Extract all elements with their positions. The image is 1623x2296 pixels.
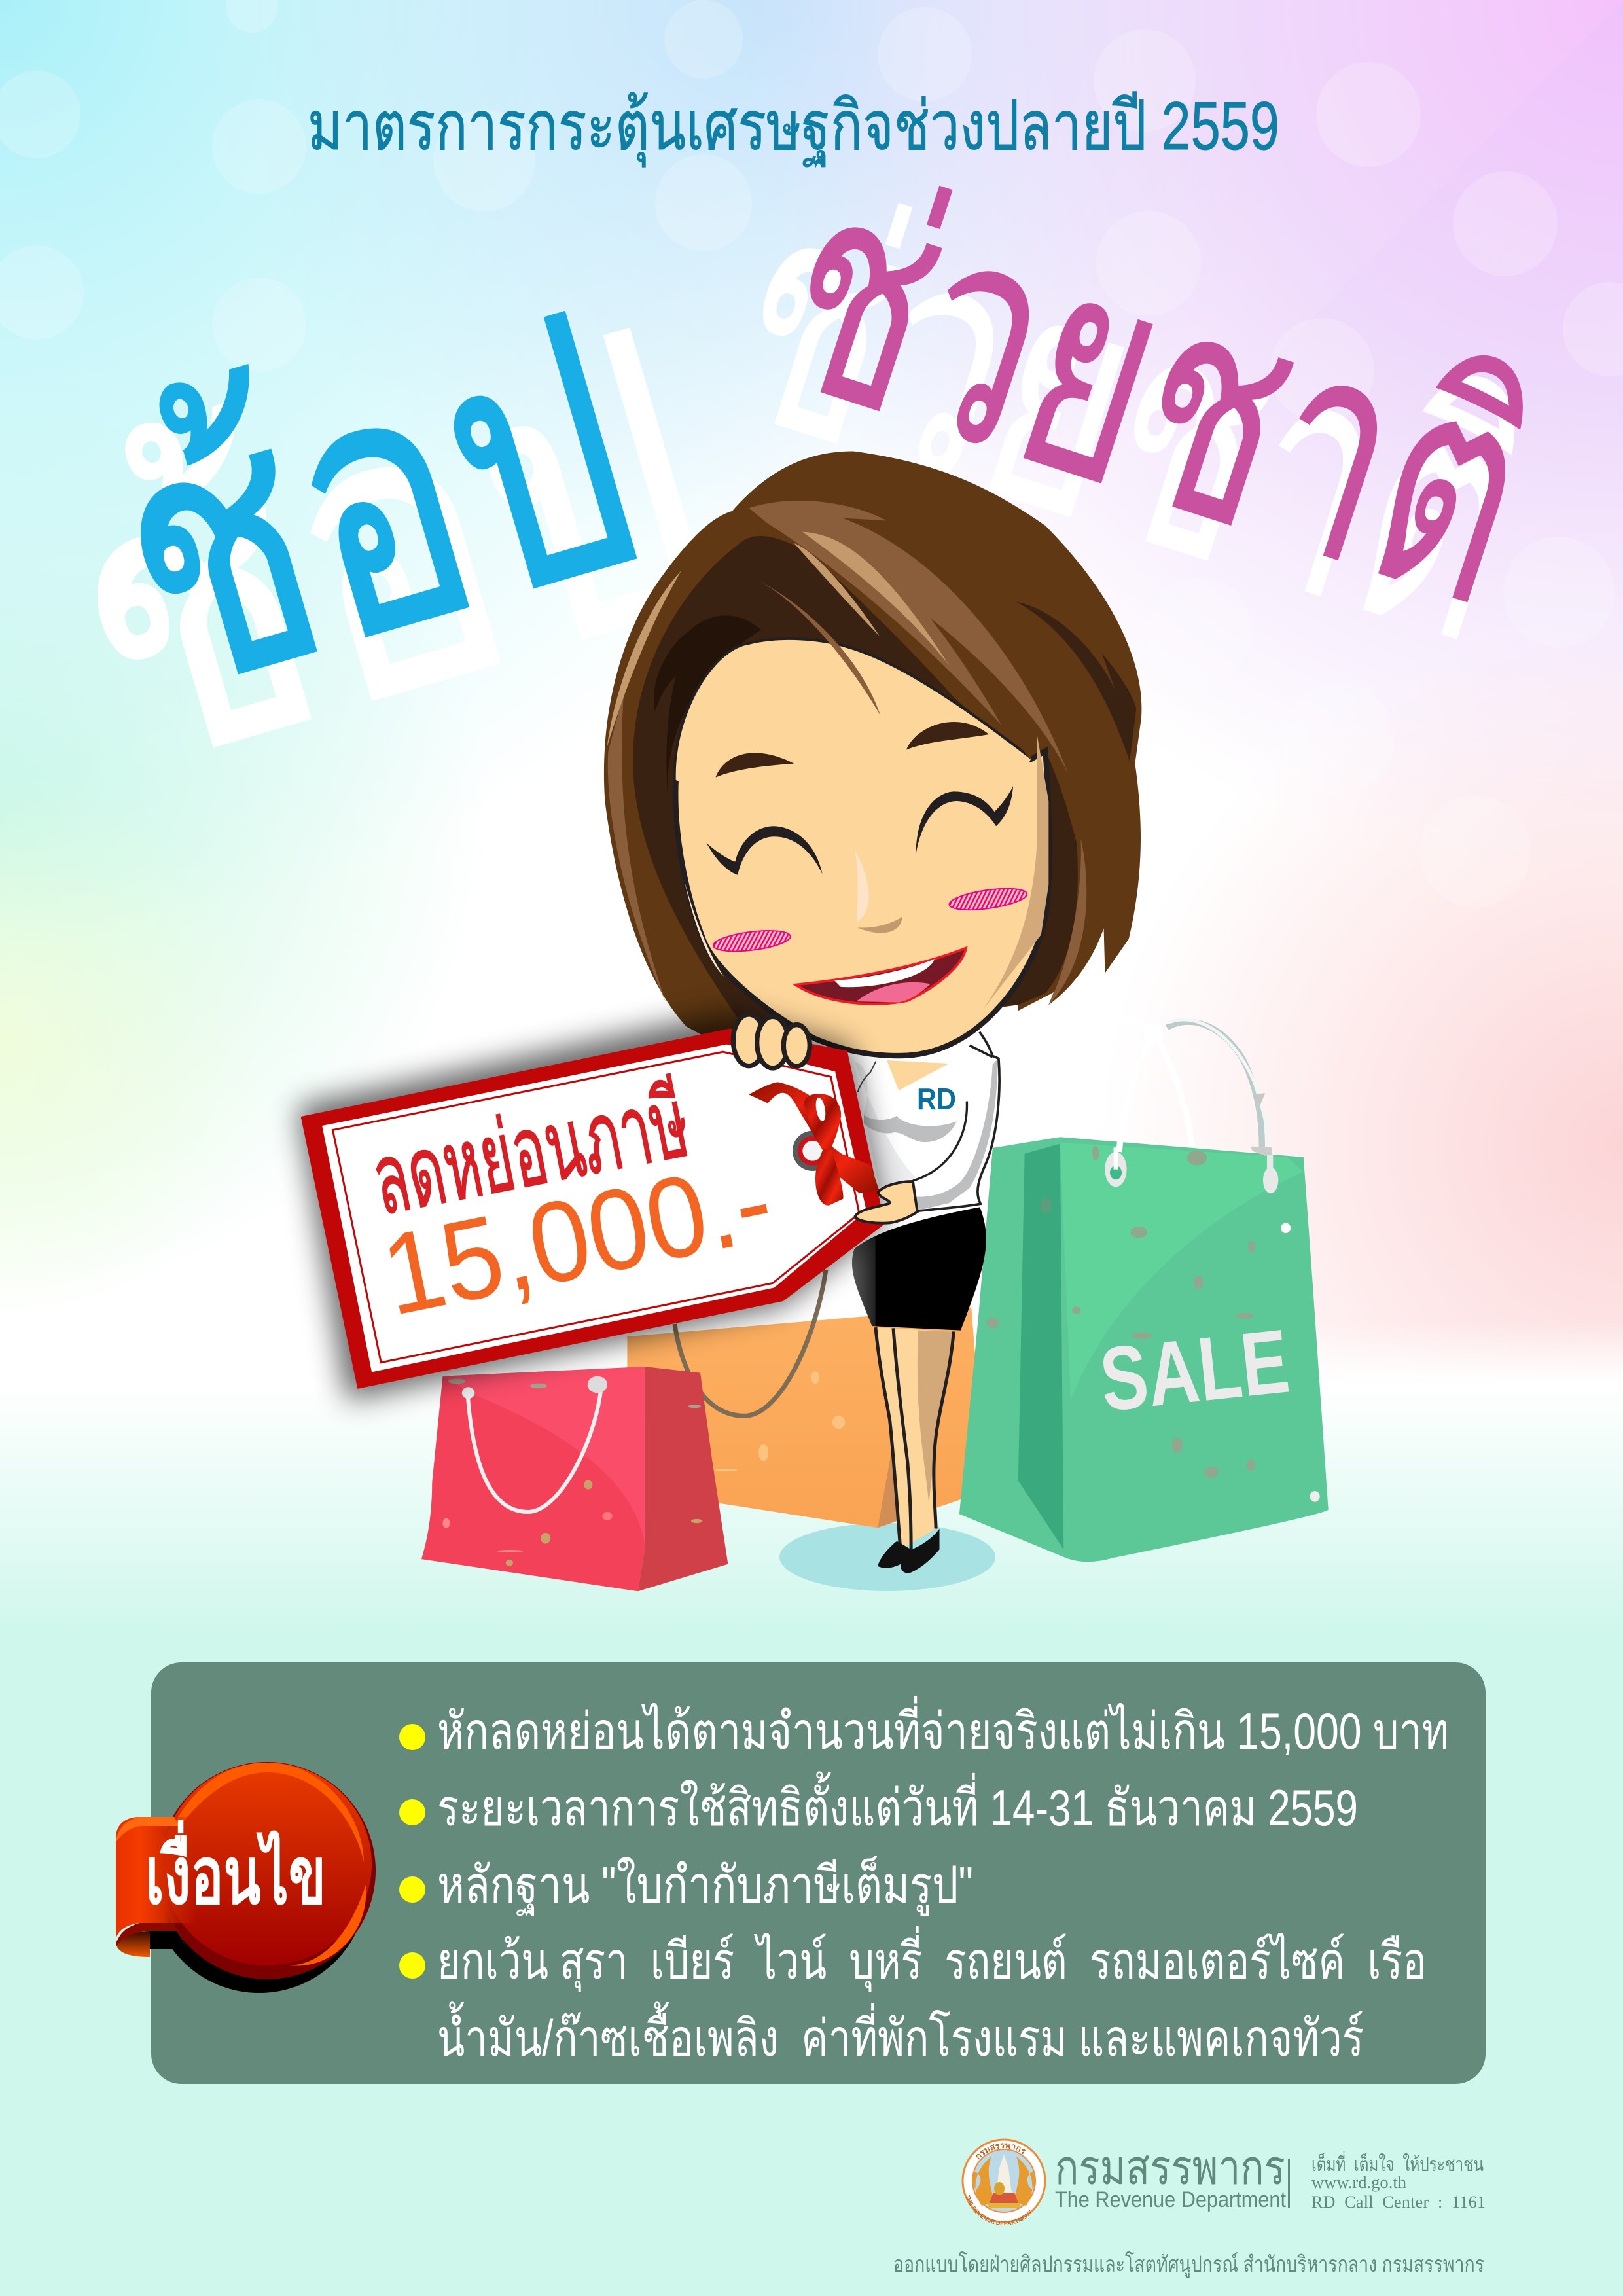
- condition bullets: [399, 1724, 425, 1979]
- contact: motto: เต็มที่ เต็มใจ ให้ประชาชน: [1311, 2151, 1484, 2176]
- shoes: [878, 1529, 940, 1573]
- eyes: [706, 786, 1013, 875]
- price tag sign: [301, 1028, 885, 1389]
- green bag front handles: [1105, 1020, 1278, 1193]
- condition 2: ระยะเวลาการใช้สิทธิตั้งแต่วันที่ 14-31 ธันวาคม 2559: [437, 1771, 1358, 1837]
- contact: website: www.rd.go.th: [1311, 2173, 1406, 2192]
- eyebrows: [715, 722, 989, 778]
- logo: revenue department seal: THE REVENUE DEPARTMENT: [966, 2195, 1032, 2225]
- contact: call center: RD Call Center : 1161: [1311, 2193, 1486, 2212]
- sign shadow: [298, 1011, 885, 1401]
- RD shirt logo: RD: [917, 1082, 956, 1116]
- floor shadow ellipse: [779, 1523, 995, 1591]
- headline ghost: shop: ช้อป: [25, 255, 751, 853]
- sign text: tax deduction: ลดหย่อนภาษี: [364, 1067, 697, 1235]
- character: shirt: [851, 1032, 999, 1211]
- legs: [876, 1327, 954, 1549]
- character: head: [604, 452, 1141, 1056]
- sign text: amount: 15,000.-: [372, 1137, 783, 1340]
- shopping bags: [421, 1137, 1329, 1591]
- hands: [733, 1014, 918, 1223]
- department name english: The Revenue Department: [1055, 2187, 1286, 2212]
- orange bag: [627, 1270, 986, 1528]
- red bag: [421, 1367, 728, 1591]
- hair: [604, 452, 1141, 1052]
- credit line: ออกแบบโดยฝ่ายศิลปกรรมและโสตทัศนูปกรณ์ สำนักบริหารกลาง กรมสรรพากร: [893, 2251, 1484, 2278]
- mouth: [796, 948, 966, 1004]
- face: [675, 640, 1049, 1056]
- panel: conditions: [151, 1662, 1486, 2084]
- logo: revenue department seal: [962, 2139, 1046, 2225]
- condition 5: น้ำมัน/ก๊าซเชื้อเพลิง ค่าที่พักโรงแรม และแพคเกจทัวร์: [437, 2001, 1364, 2067]
- logo: revenue department seal: กรมสรรพากร: [976, 2143, 1026, 2160]
- title: มาตรการกระตุ้นเศรษฐกิจช่วงปลายปี 2559: [308, 88, 1279, 168]
- nose: [855, 850, 902, 933]
- condition 3: หลักฐาน "ใบกำกับภาษีเต็มรูป": [437, 1856, 973, 1916]
- green bag: [959, 1137, 1329, 1562]
- bokeh circles: [0, 0, 1623, 907]
- badge: conditions: [116, 1762, 376, 1993]
- character: legs and skirt: [852, 1207, 986, 1573]
- skirt: [852, 1207, 986, 1331]
- department name thai: กรมสรรพากร: [1055, 2140, 1285, 2195]
- blush: [712, 885, 1028, 955]
- badge label: เงื่อนไข: [145, 1820, 326, 1920]
- fringe: [749, 501, 1136, 1005]
- headline: shop: ช้อป: [78, 247, 672, 766]
- green bag rear handles: [1044, 1019, 1192, 1147]
- SALE label: SALE: [1096, 1311, 1294, 1431]
- sign ribbon: [749, 1082, 879, 1206]
